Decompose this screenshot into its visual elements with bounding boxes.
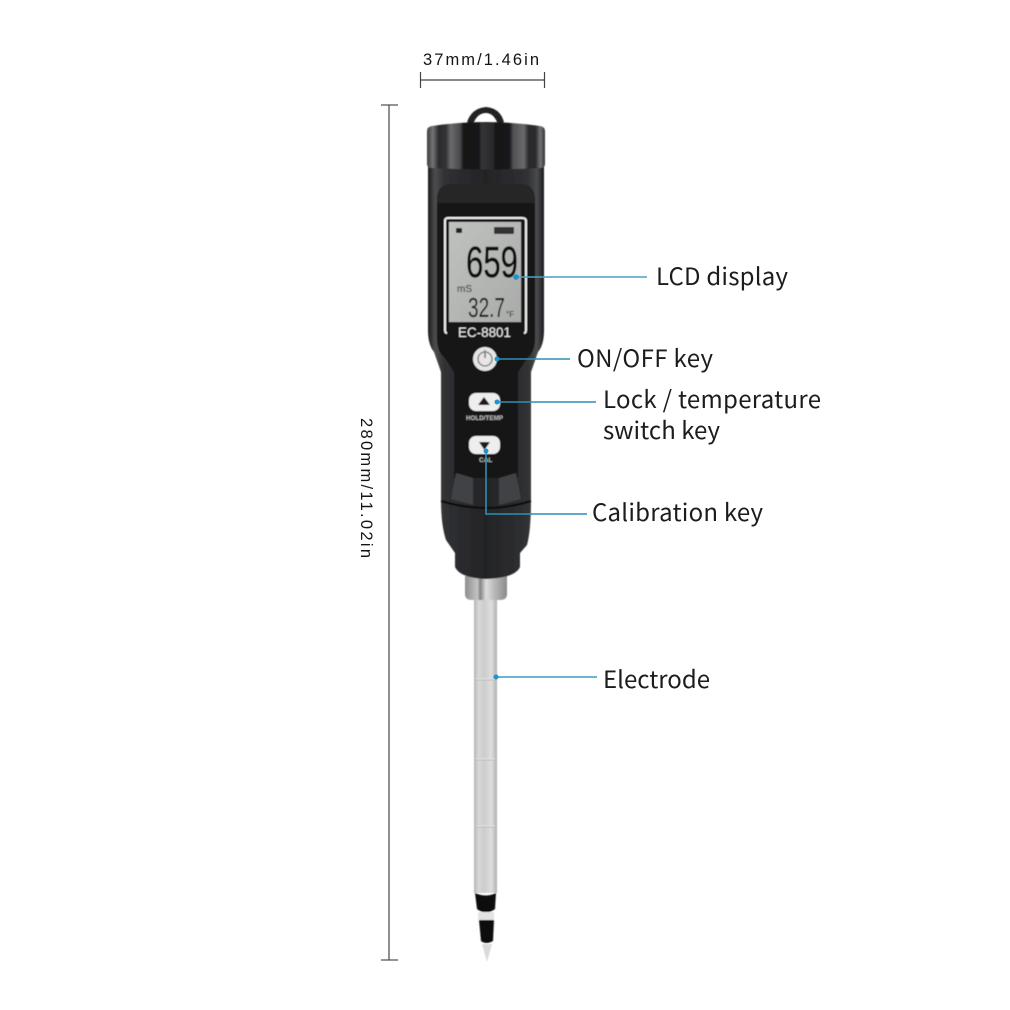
callout: lock / temperature switch key: Lock / temperature [603, 380, 821, 415]
up button [466, 393, 504, 422]
callout: electrode: Electrode [603, 660, 710, 695]
power button [473, 347, 497, 371]
callout: LCD display: LCD display [656, 257, 788, 292]
silver collar [465, 576, 507, 600]
LCD readouts [456, 227, 518, 323]
LCD readouts: 659 [466, 238, 518, 287]
front panel [437, 184, 535, 478]
collar seam [441, 501, 531, 508]
height dimension: 280mm/11.02in [357, 418, 375, 558]
callout: electrode [494, 660, 710, 695]
LCD readouts: mS [457, 284, 472, 295]
meter body [428, 166, 544, 579]
cap [427, 122, 545, 170]
callout: lock / temperature switch key [494, 380, 821, 446]
electrode rod [474, 600, 497, 893]
up button: HOLD/TEMP [466, 415, 504, 422]
LCD readouts: 32.7 [468, 292, 505, 323]
LCD screen [449, 222, 521, 322]
LCD readouts: °F [506, 310, 514, 319]
callout: LCD display [513, 257, 788, 292]
callout: lock / temperature switch key: switch key [603, 411, 720, 446]
handle loop [467, 107, 504, 123]
callout: calibration key [484, 448, 763, 528]
width dimension: 37mm/1.46in [423, 51, 539, 69]
lower shoulders [451, 473, 521, 505]
height dimension [357, 105, 398, 960]
callout: ON/OFF key: ON/OFF key [577, 339, 713, 374]
callout: calibration key: Calibration key [592, 493, 763, 528]
model label: EC-8801 [458, 324, 511, 340]
down button: CAL [479, 457, 492, 464]
width dimension [420, 51, 544, 88]
down button [469, 436, 500, 464]
electrode tip [475, 893, 496, 962]
LCD frame [445, 218, 526, 333]
meter device [427, 107, 545, 962]
callout: ON/OFF key [494, 339, 713, 374]
